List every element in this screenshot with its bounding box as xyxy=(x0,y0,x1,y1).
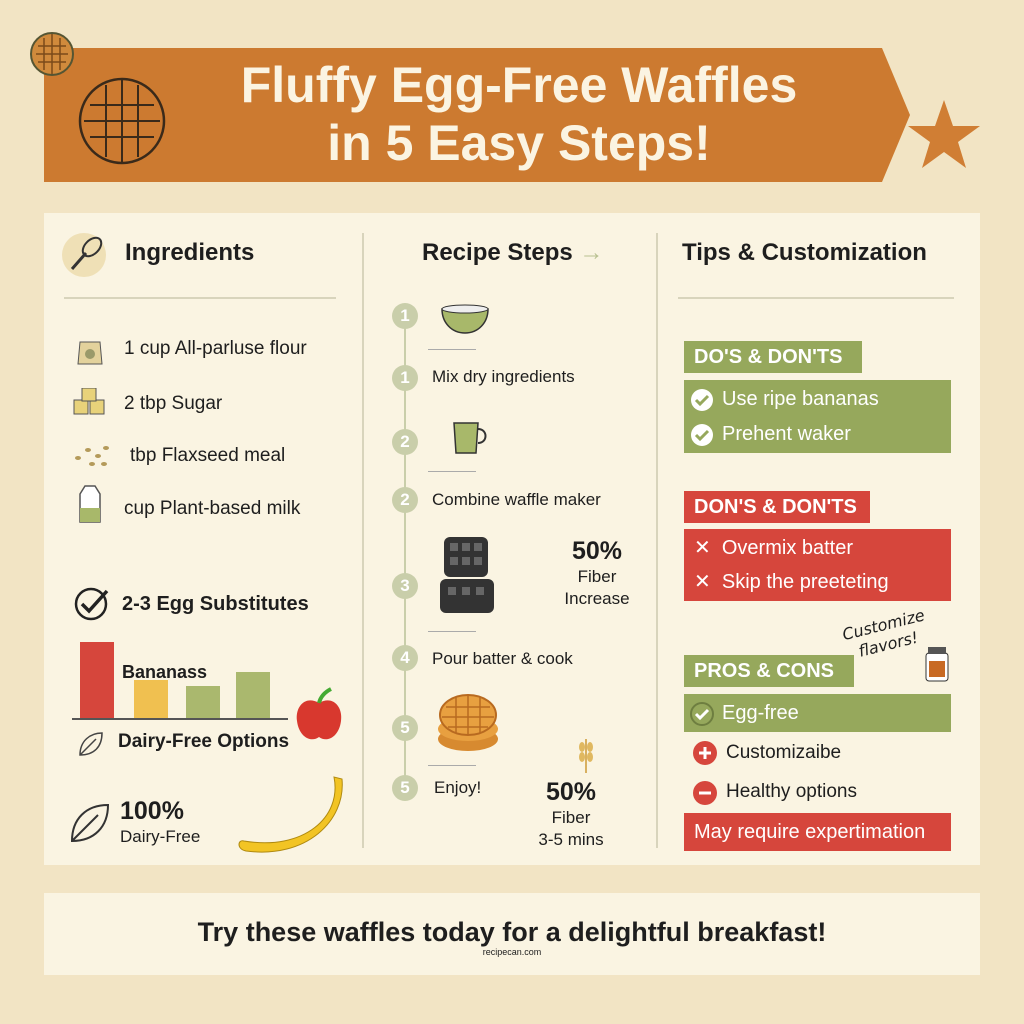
icon: apple xyxy=(296,687,342,740)
panel: recipe steps: Pour batter & cook xyxy=(432,649,573,668)
ingredient list: 2 tbp Sugar xyxy=(124,393,222,414)
do's list: Prehent waker xyxy=(722,423,851,445)
heading: tips: Tips & Customization xyxy=(682,239,927,266)
stat: 50% fiber increase xyxy=(564,537,630,608)
ingredient list: 1 cup All-parluse flour xyxy=(124,338,307,359)
callout: customize flavors: Customize xyxy=(840,605,926,644)
pros & cons label xyxy=(684,655,854,687)
footer banner: Try these waffles today for a delightful breakfast! xyxy=(198,917,826,947)
do's list xyxy=(684,380,951,453)
panel: recipe steps: 5 xyxy=(400,718,410,737)
icon: whisk xyxy=(62,233,106,277)
panel: recipe steps xyxy=(392,239,630,849)
panel: recipe steps: 5 xyxy=(400,778,410,797)
stat: 100% dairy-free xyxy=(71,797,200,846)
bar chart: Bananass xyxy=(122,662,207,682)
stat: 50% fiber 3-5 mins: Fiber xyxy=(552,808,590,827)
panel: tips & customization xyxy=(682,239,951,851)
stat: 50% fiber increase: Increase xyxy=(564,589,630,608)
panel: recipe steps: 1 xyxy=(400,306,410,325)
title text xyxy=(241,57,797,171)
ingredient list xyxy=(74,338,307,523)
panel: recipe steps: 2 xyxy=(400,490,410,509)
icon: big waffle xyxy=(78,78,166,164)
heading: recipe steps: Recipe Steps → xyxy=(422,239,603,266)
stat: 50% fiber increase: Fiber xyxy=(578,567,616,586)
panel: recipe steps: 2 xyxy=(400,432,410,451)
stat: 100% dairy-free: Dairy-Free xyxy=(120,827,200,846)
pros & cons list: May require expertimation xyxy=(694,821,925,843)
pros & cons label: PROS & CONS xyxy=(694,660,834,682)
icon: bowl xyxy=(441,304,489,334)
panel: recipe steps: Combine waffle maker xyxy=(432,490,601,509)
bar chart xyxy=(72,642,288,720)
footer banner xyxy=(44,893,980,975)
icon: waffle maker xyxy=(440,537,494,613)
panel: recipe steps: 4 xyxy=(400,648,410,667)
icon: small waffle xyxy=(30,32,74,76)
title banner xyxy=(44,48,910,182)
pros & cons list: Customizaibe xyxy=(726,742,841,763)
stat: 50% fiber increase: 50% xyxy=(572,537,622,565)
icon: waffle stack xyxy=(438,694,498,751)
stat: 50% fiber 3-5 mins xyxy=(538,778,604,849)
title text: Fluffy Egg-Free Waffles xyxy=(241,57,797,113)
icon: measuring cup xyxy=(453,422,486,454)
dairy-free options: Dairy-Free Options xyxy=(118,731,289,752)
don'ts list xyxy=(684,529,951,601)
ingredient list: cup Plant-based milk xyxy=(124,498,300,519)
panel: recipe steps: 3 xyxy=(400,576,410,595)
don'ts list: ✕ Overmix batter xyxy=(694,537,853,559)
panel: recipe steps: Mix dry ingredients xyxy=(432,367,575,386)
callout: customize flavors xyxy=(840,605,948,682)
stat: 50% fiber 3-5 mins: 50% xyxy=(546,778,596,806)
pros & cons list: Egg-free xyxy=(722,702,799,724)
heading: ingredients: Ingredients xyxy=(125,239,254,266)
callout: customize flavors: flavors! xyxy=(857,628,920,661)
don'ts label: DON'S & DON'TS xyxy=(694,496,857,518)
do's label xyxy=(684,341,862,373)
pros & cons list: Healthy options xyxy=(726,781,857,802)
panel: recipe steps: 1 xyxy=(400,368,410,387)
main panel xyxy=(44,213,980,865)
pros & cons list xyxy=(684,694,951,851)
panel: recipe steps: Enjoy! xyxy=(434,778,481,797)
icon: wheat xyxy=(579,739,593,773)
stat: 50% fiber 3-5 mins: 3-5 mins xyxy=(538,830,604,849)
don'ts label xyxy=(684,491,870,523)
icon: star xyxy=(908,100,980,168)
egg substitutes heading xyxy=(74,588,309,620)
footer banner: recipecan.com xyxy=(483,947,541,957)
don'ts list: ✕ Skip the preeteting xyxy=(694,571,889,593)
do's list: Use ripe bananas xyxy=(722,388,879,410)
title text: in 5 Easy Steps! xyxy=(327,115,711,171)
do's label: DO'S & DON'TS xyxy=(694,346,842,368)
panel: ingredients xyxy=(62,233,343,853)
ingredient list: tbp Flaxseed meal xyxy=(130,445,285,466)
icon: banana xyxy=(238,776,343,853)
egg substitutes heading: 2-3 Egg Substitutes xyxy=(122,593,309,615)
stat: 100% dairy-free: 100% xyxy=(120,797,184,825)
dairy-free options xyxy=(79,731,289,756)
